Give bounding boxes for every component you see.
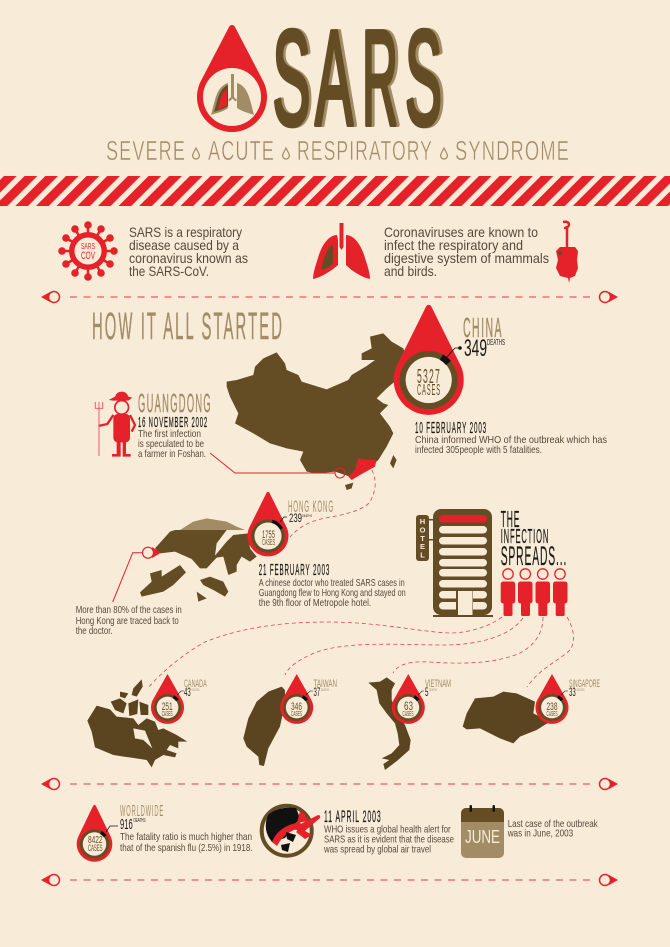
- label: Canada 43 deaths: DEATHS: [192, 687, 200, 692]
- drop: China 5327 cases: 5327: [417, 366, 441, 388]
- label: Canada 43 deaths: [184, 678, 207, 699]
- dashed route: hotel to Taiwan: [285, 618, 523, 675]
- stat: 239 deaths: DEATHS: [302, 513, 312, 518]
- text: WORLDWIDE: [120, 803, 164, 820]
- text: 16 NOVEMBER 2002: [138, 414, 208, 431]
- text: WHO health alert: was spread by global air travel: [323, 845, 431, 856]
- subtitle: severe acute respiratory syndrome: [106, 135, 570, 166]
- icon: hotel building: L: [420, 550, 425, 560]
- icon: hotel building: E: [420, 542, 425, 551]
- intro text: coronaviruses: Coronaviruses are known to: [384, 224, 538, 240]
- text: first infection: a farmer in Foshan.: [138, 449, 206, 460]
- icon: hotel building: T: [420, 534, 425, 543]
- drop: Vietnam 63 cases: [392, 674, 425, 724]
- title: SARS: [272, 2, 442, 154]
- map: Canada: [87, 679, 187, 767]
- text: Chinese doctor: [259, 578, 406, 609]
- stat: 239 deaths: 239: [289, 511, 302, 525]
- text: 80% of cases: [76, 605, 182, 637]
- drop: Singapore 238 cases: 238: [546, 701, 558, 713]
- text: SINGAPORE: [569, 678, 600, 690]
- text: fatality ratio: [120, 832, 252, 854]
- map: China: [227, 333, 410, 490]
- stat: 916 deaths: DEATHS: [134, 818, 146, 824]
- icon: hotel building: [416, 509, 493, 617]
- title shadow: SARS: A: [318, 2, 356, 154]
- text: 80% of cases: the doctor.: [76, 626, 113, 637]
- text: SPREADS...: [501, 541, 567, 571]
- text: 11 APRIL 2003: [324, 808, 382, 826]
- label: Vietnam 5 deaths: VIETNAM: [425, 678, 451, 690]
- icon: hotel building: H: [420, 517, 425, 526]
- intro text: coronaviruses: infect the respiratory and: [384, 237, 523, 253]
- heading: the infection spreads: [501, 506, 567, 571]
- title: SARS: S: [272, 2, 310, 154]
- label: Canada 43 deaths: 43: [184, 687, 191, 699]
- icon: farmer: [95, 392, 135, 457]
- label: Singapore 33 deaths: 33: [569, 687, 576, 699]
- label: Vietnam 5 deaths: 5: [425, 687, 428, 699]
- drop: China 5327 cases: CASES: [417, 382, 441, 399]
- drop: Canada 251 cases: 251: [162, 701, 173, 713]
- separator 3: [41, 874, 618, 886]
- separator 2: [41, 778, 618, 790]
- text: Chinese doctor: the 9th floor of Metropole hotel.: [259, 598, 371, 609]
- intro text: coronaviruses: [384, 224, 549, 279]
- icon: June calendar: [461, 805, 504, 858]
- text: S: [405, 2, 442, 154]
- drop: worldwide 8422 cases: 8422: [88, 835, 103, 846]
- icon: coronavirus: SARS: [81, 241, 95, 251]
- drop: Hong Kong 1755 cases: 1755: [262, 529, 275, 541]
- drop: Vietnam 63 cases: 63: [404, 699, 413, 713]
- label: Vietnam 5 deaths: DEATHS: [429, 687, 437, 692]
- icon: coronavirus: COV: [81, 250, 95, 262]
- text: China informed WHO: [415, 435, 607, 456]
- intro text: coronaviruses: digestive system of mammals: [384, 250, 549, 266]
- text: Chinese doctor: A chinese doctor who treated SARS cases in: [259, 578, 405, 589]
- subtitle: severe acute respiratory syndrome: SYNDROME: [455, 135, 570, 166]
- text: WHO health alert: SARS as it is evident that the disease: [324, 835, 454, 846]
- drop: Vietnam 63 cases: CASES: [402, 711, 414, 718]
- title: SARS: A: [315, 2, 353, 154]
- text: HONG KONG: [288, 497, 334, 516]
- map: Vietnam: [368, 677, 411, 770]
- label: Taiwan 37 deaths: TAIWAN: [314, 678, 337, 690]
- title: SARS: R: [362, 2, 398, 154]
- stat: 916 deaths: 916: [120, 816, 133, 833]
- label: Canada 43 deaths: CANADA: [184, 678, 207, 690]
- stat: 349 deaths: DEATHS: [487, 338, 505, 347]
- icon: hotel building: O: [420, 526, 426, 534]
- text: last case: [507, 819, 598, 840]
- red diagonal stripe band: [0, 176, 670, 206]
- stat: 349 deaths: 349: [464, 335, 487, 362]
- drop: worldwide 8422 cases: CASES: [88, 843, 102, 853]
- text: fatality ratio: The fatality ratio is much higher than: [120, 832, 252, 843]
- drop: Taiwan 346 cases: [280, 674, 313, 724]
- text: WHO health alert: WHO issues a global health alert for: [324, 825, 451, 836]
- map: Hong Kong: [140, 518, 257, 602]
- text: first infection: is speculated to be: [138, 439, 204, 450]
- icon: digestive system: [556, 222, 578, 283]
- heading: the infection spreads: INFECTION: [501, 526, 549, 548]
- drop: worldwide 8422 cases: [77, 805, 118, 862]
- text: WHO health alert: [323, 825, 454, 856]
- drop: Hong Kong 1755 cases: CASES: [262, 538, 275, 547]
- marker and leader: Hong Kong: [113, 547, 161, 602]
- text: GUANGDONG: [138, 388, 212, 418]
- label: Singapore 33 deaths: DEATHS: [576, 687, 585, 692]
- subtitle: severe acute respiratory syndrome: SEVERE: [106, 135, 186, 166]
- icon: blood drop with lungs: [197, 25, 267, 132]
- map: Singapore: [463, 692, 550, 743]
- drop: China 5327 cases: [394, 305, 464, 415]
- title shadow: SARS: R: [365, 2, 401, 154]
- drop: Singapore 238 cases: [536, 674, 568, 724]
- dashed route: China to Hong Kong: [290, 470, 375, 537]
- text: CHINA: [463, 312, 503, 343]
- map: Taiwan: [243, 687, 285, 766]
- text: first infection: [138, 429, 206, 460]
- icon: red lungs: [313, 223, 370, 279]
- intro text: what SARS is: coronavirus known as: [129, 250, 248, 266]
- intro text: what SARS is: disease caused by a: [129, 237, 239, 253]
- dashed route: hotel to Canada: [148, 617, 502, 688]
- label: Vietnam 5 deaths: [425, 678, 451, 699]
- text: fatality ratio: that of the spanish flu (2.5%) in 1918.: [120, 843, 252, 854]
- text: 21 FEBRUARY 2003: [259, 562, 330, 579]
- drop: Canada 251 cases: CASES: [162, 711, 173, 718]
- label: Taiwan 37 deaths: 37: [314, 687, 320, 699]
- intro text: what SARS is: the SARS-CoV.: [129, 263, 209, 279]
- header: SARS logo and title: [197, 2, 445, 154]
- drop: Canada 251 cases: [151, 674, 184, 724]
- text: first infection: The first infection: [138, 429, 201, 440]
- text: 10 FEBRUARY 2003: [415, 420, 487, 437]
- intro text: coronaviruses: and birds.: [384, 263, 437, 279]
- leader line: Guangdong to map: [210, 453, 345, 478]
- text: China informed WHO: infected 305people with 5 fatalities.: [415, 445, 542, 456]
- label: Singapore 33 deaths: [569, 678, 600, 699]
- separator 1: [41, 292, 618, 302]
- heading: the infection spreads: THE: [501, 506, 520, 532]
- dashed route: hotel to Singapore: [527, 617, 573, 687]
- intro text: what SARS is: [129, 224, 248, 279]
- icon: coronavirus: [58, 221, 118, 281]
- label: Taiwan 37 deaths: DEATHS: [321, 687, 329, 692]
- text: China informed WHO: China informed WHO of the outbreak which has: [415, 435, 607, 446]
- subtitle: severe acute respiratory syndrome: RESPIRATORY: [297, 135, 433, 166]
- drop: Taiwan 346 cases: 346: [291, 701, 302, 713]
- text: Chinese doctor: Guangdong flew to Hong Kong and stayed on: [259, 588, 406, 599]
- text: last case: was in June, 2003: [507, 828, 573, 840]
- dashed route: hotel to Vietnam: [393, 617, 543, 673]
- text: S: [408, 2, 445, 154]
- icon: globe with plane: [262, 806, 320, 856]
- text: HOW IT ALL STARTED: [92, 306, 284, 348]
- title shadow: SARS: [275, 2, 445, 154]
- subtitle: severe acute respiratory syndrome: ACUTE: [208, 135, 275, 166]
- icon: four infected people: [501, 569, 568, 616]
- intro text: what SARS is: SARS is a respiratory: [129, 224, 242, 240]
- label: Taiwan 37 deaths: [314, 678, 337, 699]
- text: last case: Last case of the outbreak: [508, 819, 598, 830]
- title shadow: SARS: S: [275, 2, 313, 154]
- drop: Singapore 238 cases: CASES: [546, 711, 558, 718]
- text: 80% of cases: More than 80% of the cases in: [76, 605, 182, 616]
- icon: June calendar: JUNE: [465, 827, 500, 847]
- drop: Hong Kong 1755 cases: [248, 492, 288, 556]
- text: 80% of cases: Hong Kong are traced back to: [76, 616, 179, 627]
- drop: Taiwan 346 cases: CASES: [291, 711, 302, 718]
